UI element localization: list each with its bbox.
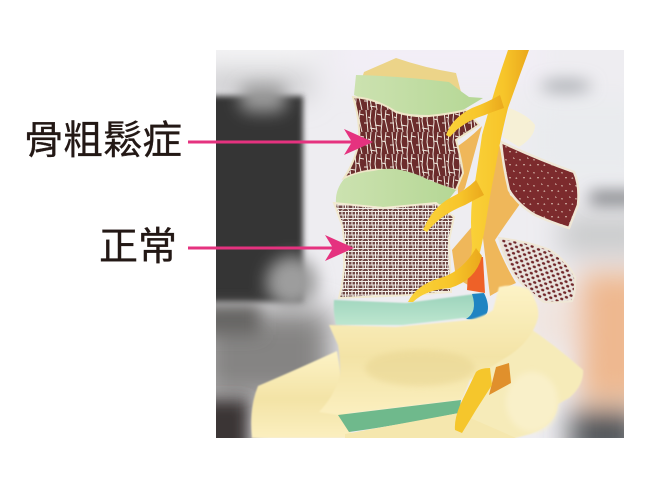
lower spinous process: normal <box>499 238 575 302</box>
sacrum: cream bone at lower left <box>251 351 352 438</box>
orange tissue below <box>489 363 511 395</box>
yellow nerve bundle <box>408 50 529 302</box>
blue disc edge <box>466 293 488 319</box>
photo background: blurred room <box>216 50 624 438</box>
top disc: green <box>354 75 483 115</box>
upper vertebra: osteoporotic bone <box>344 97 479 190</box>
lower nerve root <box>455 368 492 433</box>
crumbled top of upper vertebra <box>360 58 461 92</box>
vertebra shading <box>365 350 475 386</box>
red spinal cord <box>467 257 485 293</box>
right facet joints <box>471 330 584 438</box>
lower facet bump <box>506 372 558 432</box>
bottom disc: green <box>338 400 461 432</box>
photo: spine model <box>216 50 624 438</box>
upper spinous process: osteoporotic <box>501 142 578 228</box>
lower disc: teal <box>334 293 484 325</box>
label: 正常: 正常 <box>99 226 177 269</box>
arrow: normal <box>188 235 354 261</box>
infographic: osteoporosis vs normal spine model <box>26 50 624 438</box>
cream process behind nerve <box>503 108 535 147</box>
bottom cream bone <box>345 413 516 438</box>
label: 骨粗鬆症: 骨粗鬆症 <box>24 119 182 163</box>
lower vertebra: normal bone <box>334 203 454 298</box>
middle disc: green <box>336 169 456 208</box>
arrow: osteoporosis <box>188 129 373 155</box>
lower vertebra: cream bone <box>319 286 538 415</box>
orange ligament tissue <box>452 126 520 296</box>
